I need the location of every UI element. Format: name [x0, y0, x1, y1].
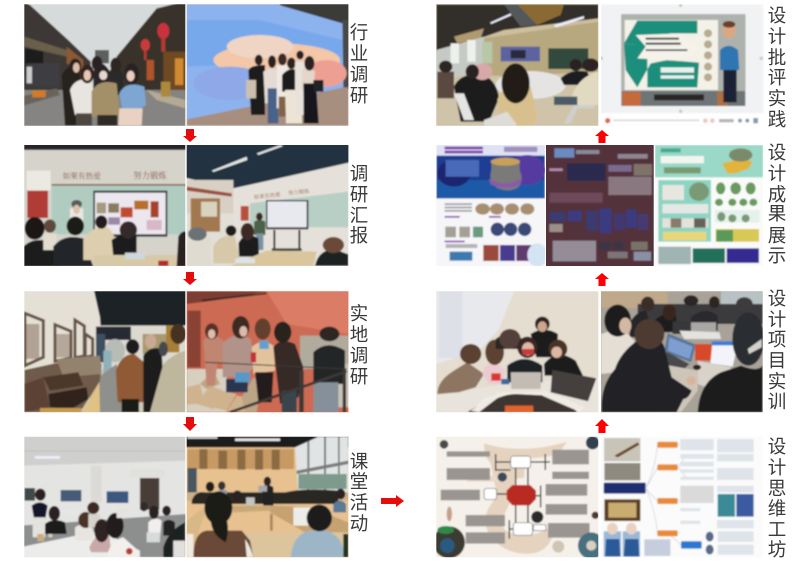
label: 设计成果展示 [768, 142, 786, 266]
label: 实地调研: 研 [350, 366, 368, 387]
label: 设计思维工坊: 思 [768, 478, 786, 499]
arrow: up 2 [595, 273, 609, 286]
arrow: up 1 [595, 130, 609, 143]
label: 实地调研 [350, 303, 368, 387]
label: 设计批评实践: 评 [768, 67, 786, 88]
label: 设计成果展示: 展 [768, 225, 786, 246]
photo: classroom activity, wooden room [186, 436, 348, 558]
label: 调研汇报: 汇 [350, 205, 368, 226]
label: 设计成果展示: 示 [768, 245, 786, 266]
photo: group in front of digital wall [186, 4, 348, 126]
arrow: down 2 [183, 272, 197, 285]
label: 设计思维工坊: 计 [768, 457, 786, 478]
photo: street research group [24, 4, 186, 126]
label: 课堂活动: 课 [350, 451, 368, 472]
label: 设计思维工坊: 维 [768, 498, 786, 519]
photo: project training, laptops [601, 291, 763, 412]
label: 调研汇报 [350, 163, 368, 246]
label: 设计成果展示: 计 [768, 163, 786, 184]
label: 设计成果展示: 成 [768, 184, 786, 205]
mind map: culture analysis on beige [436, 436, 598, 558]
label: 调研汇报: 研 [350, 184, 368, 205]
label: 设计项目实训: 实 [768, 371, 786, 392]
label: 设计批评实践: 计 [768, 26, 786, 47]
photo: project training, group around laptop [436, 291, 598, 412]
label: 课堂活动 [350, 451, 368, 534]
photo: classroom report, teacher at screen [24, 145, 186, 266]
arrow: down 3 [183, 417, 197, 431]
photo: classroom report, teacher at screen: 努力锻炼 [133, 170, 167, 180]
mind map: museum with images and nodes [602, 437, 755, 558]
label: 设计批评实践: 设 [768, 5, 786, 26]
label: 课堂活动: 动 [350, 513, 368, 534]
photo: design critique in conference room [436, 4, 598, 126]
label: 设计项目实训: 计 [768, 309, 786, 330]
poster: blue vessel design [436, 145, 545, 266]
label: 设计成果展示: 果 [768, 203, 786, 224]
label: 设计成果展示: 设 [768, 142, 786, 163]
label: 设计批评实践: 践 [768, 109, 786, 130]
video player: slide with presenter [601, 4, 764, 124]
photo: brick wall museum visit [186, 291, 348, 412]
label: 设计思维工坊 [768, 436, 786, 560]
photo: classroom report, teacher at screen: 如果有热爱 [63, 170, 101, 180]
label: 设计批评实践: 实 [768, 88, 786, 109]
label: 设计项目实训: 设 [768, 288, 786, 309]
label: 实地调研: 实 [350, 303, 368, 324]
label: 设计批评实践 [768, 5, 786, 130]
poster: green character design [655, 145, 763, 265]
label: 行业调研: 研 [350, 85, 368, 106]
label: 设计项目实训: 项 [768, 329, 786, 350]
label: 调研汇报: 报 [350, 225, 368, 246]
label: 设计项目实训: 训 [768, 391, 786, 412]
label: 设计思维工坊: 设 [768, 436, 786, 457]
label: 设计项目实训: 目 [768, 350, 786, 371]
poster: dark maroon museum design [546, 145, 654, 266]
arrow: down 1 [183, 129, 197, 142]
label: 实地调研: 地 [350, 324, 368, 345]
label: 设计思维工坊: 工 [768, 519, 786, 540]
label: 行业调研: 业 [350, 43, 368, 64]
label: 行业调研: 行 [350, 22, 368, 43]
label: 实地调研: 调 [350, 345, 368, 366]
label: 设计思维工坊: 坊 [768, 539, 786, 560]
label: 行业调研: 调 [350, 64, 368, 85]
photo: classroom report, wide view [186, 145, 348, 266]
label: 课堂活动: 堂 [350, 471, 368, 492]
photo: classroom report, wide view: 如果有热爱 [253, 190, 281, 201]
arrow: right to second column [381, 495, 404, 507]
photo: classroom activity, white room [24, 436, 186, 558]
photo: museum field research [24, 291, 186, 412]
label: 行业调研 [350, 22, 368, 106]
label: 调研汇报: 调 [350, 163, 368, 184]
label: 设计项目实训 [768, 288, 786, 412]
label: 课堂活动: 活 [350, 492, 368, 513]
photo: classroom report, wide view: 努力锻炼 [288, 187, 310, 197]
arrow: up 3 [595, 419, 609, 433]
label: 设计批评实践: 批 [768, 47, 786, 68]
